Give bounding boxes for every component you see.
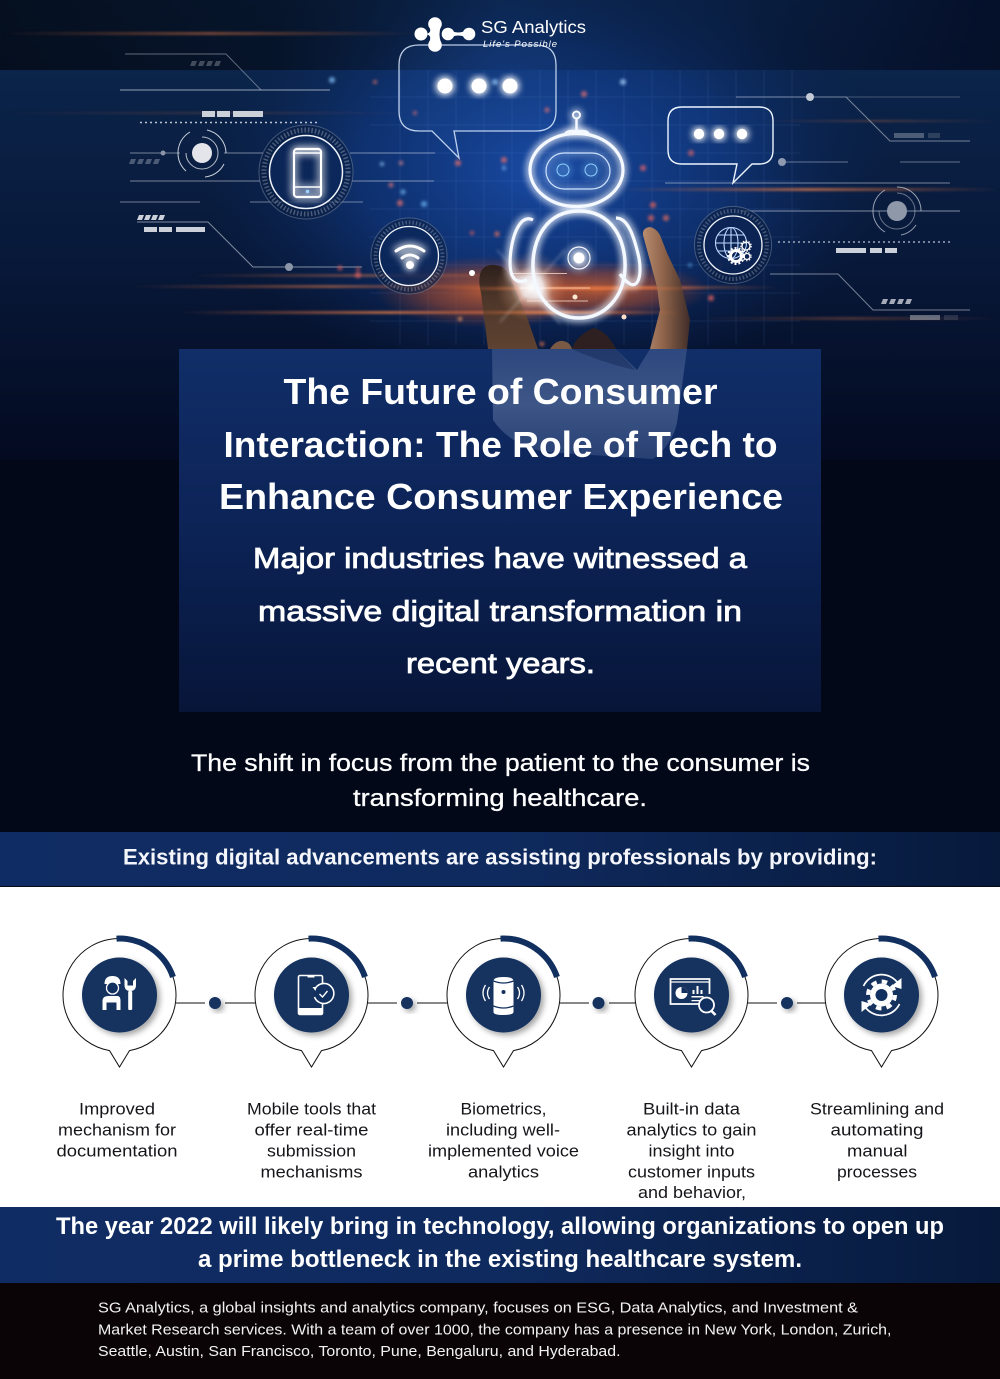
- caption 1: mechanism for: [58, 1120, 176, 1140]
- caption 2: mechanisms: [260, 1162, 362, 1182]
- caption 2: Mobile tools that: [247, 1100, 376, 1118]
- footer: SG Analytics, a global insights and analytics company, focuses on ESG, Data Analytics, and Investment &: [98, 1300, 858, 1316]
- caption 4: Built-in data: [643, 1100, 741, 1118]
- conclusion banner: The year 2022 will likely bring in technology, allowing organizations to open up: [56, 1213, 944, 1240]
- caption 3: analytics: [468, 1162, 539, 1182]
- intro sentence: [191, 750, 810, 812]
- icon: voice speaker: [483, 977, 524, 1015]
- icon: globe and gears in ring: [694, 206, 772, 284]
- title: Enhance Consumer Experience: [219, 476, 783, 517]
- intro sentence: transforming healthcare.: [353, 785, 647, 812]
- logo: [414, 17, 586, 52]
- streaks and sparks over hand: [440, 270, 710, 320]
- caption 4: and behavior,: [638, 1183, 746, 1202]
- icon: wifi in ring: [371, 218, 447, 294]
- benefit 1: documentation pin: [63, 938, 176, 1067]
- logo wordmark: SG Analytics: [481, 17, 586, 37]
- panel: white benefits section: [0, 887, 1000, 1207]
- caption 4: customer inputs: [628, 1162, 755, 1182]
- icon: robot: [510, 112, 640, 318]
- icon: dashboard with magnifier: [670, 979, 716, 1015]
- icon: gear with cycle arrows: [862, 975, 902, 1015]
- intro sentence: The shift in focus from the patient to the consumer is: [191, 750, 810, 777]
- tech lines: left: [120, 54, 435, 271]
- caption 3: implemented voice: [428, 1142, 579, 1160]
- section banner: Existing digital advancements are assisting professionals by providing:: [123, 844, 877, 870]
- title: The Future of Consumer: [284, 371, 718, 412]
- subtitle: Major industries have witnessed a: [253, 543, 748, 575]
- tech lines: right: [665, 93, 970, 320]
- panel: title block: [179, 349, 821, 712]
- title: Interaction: The Role of Tech to: [224, 424, 778, 465]
- icon: phone in ring: [259, 125, 353, 219]
- caption 2: [247, 1100, 376, 1182]
- caption 5: manual: [847, 1142, 908, 1160]
- subtitle: recent years.: [406, 648, 595, 680]
- icon: phone with clock: [298, 976, 334, 1015]
- section banner: [0, 832, 1000, 887]
- title: [219, 371, 783, 517]
- hand seen through panel: [492, 349, 687, 459]
- subtitle: [253, 543, 748, 680]
- conclusion banner: [0, 1207, 1000, 1283]
- caption 5: Streamlining and: [810, 1100, 944, 1118]
- caption 1: documentation: [56, 1142, 178, 1160]
- icon: worker and wrench: [102, 976, 136, 1010]
- caption 2: submission: [267, 1142, 356, 1160]
- icon: large chat bubble: [399, 45, 556, 158]
- icon: left radar: [178, 130, 226, 177]
- caption 3: including well-: [446, 1120, 560, 1140]
- hero background: [0, 0, 1000, 832]
- caption 3: Biometrics,: [460, 1100, 546, 1118]
- small knuckle: [550, 341, 572, 349]
- benefit 5: automation pin: [825, 938, 938, 1067]
- icon: right radar: [873, 187, 921, 235]
- benefit captions: [56, 1100, 944, 1202]
- footer: Seattle, Austin, San Francisco, Toronto, Pune, Bengaluru, and Hyderabad.: [98, 1344, 620, 1360]
- caption 3: [428, 1100, 579, 1182]
- icon: small chat bubble: [668, 107, 773, 183]
- logo mark: [414, 17, 475, 52]
- caption 4: [626, 1100, 756, 1202]
- conclusion banner: a prime bottleneck in the existing healthcare system.: [198, 1246, 802, 1273]
- connector lines and dots: [176, 997, 826, 1009]
- left finger: [479, 265, 538, 349]
- glowing particles: [329, 77, 722, 346]
- caption 4: insight into: [648, 1142, 734, 1160]
- caption 1: Improved: [79, 1100, 155, 1118]
- caption 5: [810, 1100, 944, 1182]
- caption 1: [56, 1100, 178, 1160]
- caption 2: offer real-time: [254, 1120, 368, 1140]
- large knuckle: [572, 328, 616, 349]
- right finger: [643, 227, 690, 349]
- orange light streaks: [0, 32, 1000, 320]
- benefit 2: mobile tools pin: [255, 938, 368, 1067]
- benefit 3: biometrics pin: [447, 938, 560, 1067]
- footer: Market Research services. With a team of over 1000, the company has a presence in New York, London, Zurich,: [98, 1322, 892, 1338]
- caption 5: automating: [830, 1120, 924, 1140]
- light burst: [496, 250, 568, 324]
- footer: [0, 1283, 1000, 1379]
- logo tagline: Life's Possible: [483, 39, 557, 50]
- benefit 4: data analytics pin: [635, 938, 748, 1067]
- hand: [479, 227, 690, 349]
- caption 5: processes: [837, 1162, 917, 1182]
- subtitle: massive digital transformation in: [258, 596, 742, 628]
- orange glow behind hand: [375, 256, 710, 328]
- caption 4: analytics to gain: [626, 1120, 756, 1140]
